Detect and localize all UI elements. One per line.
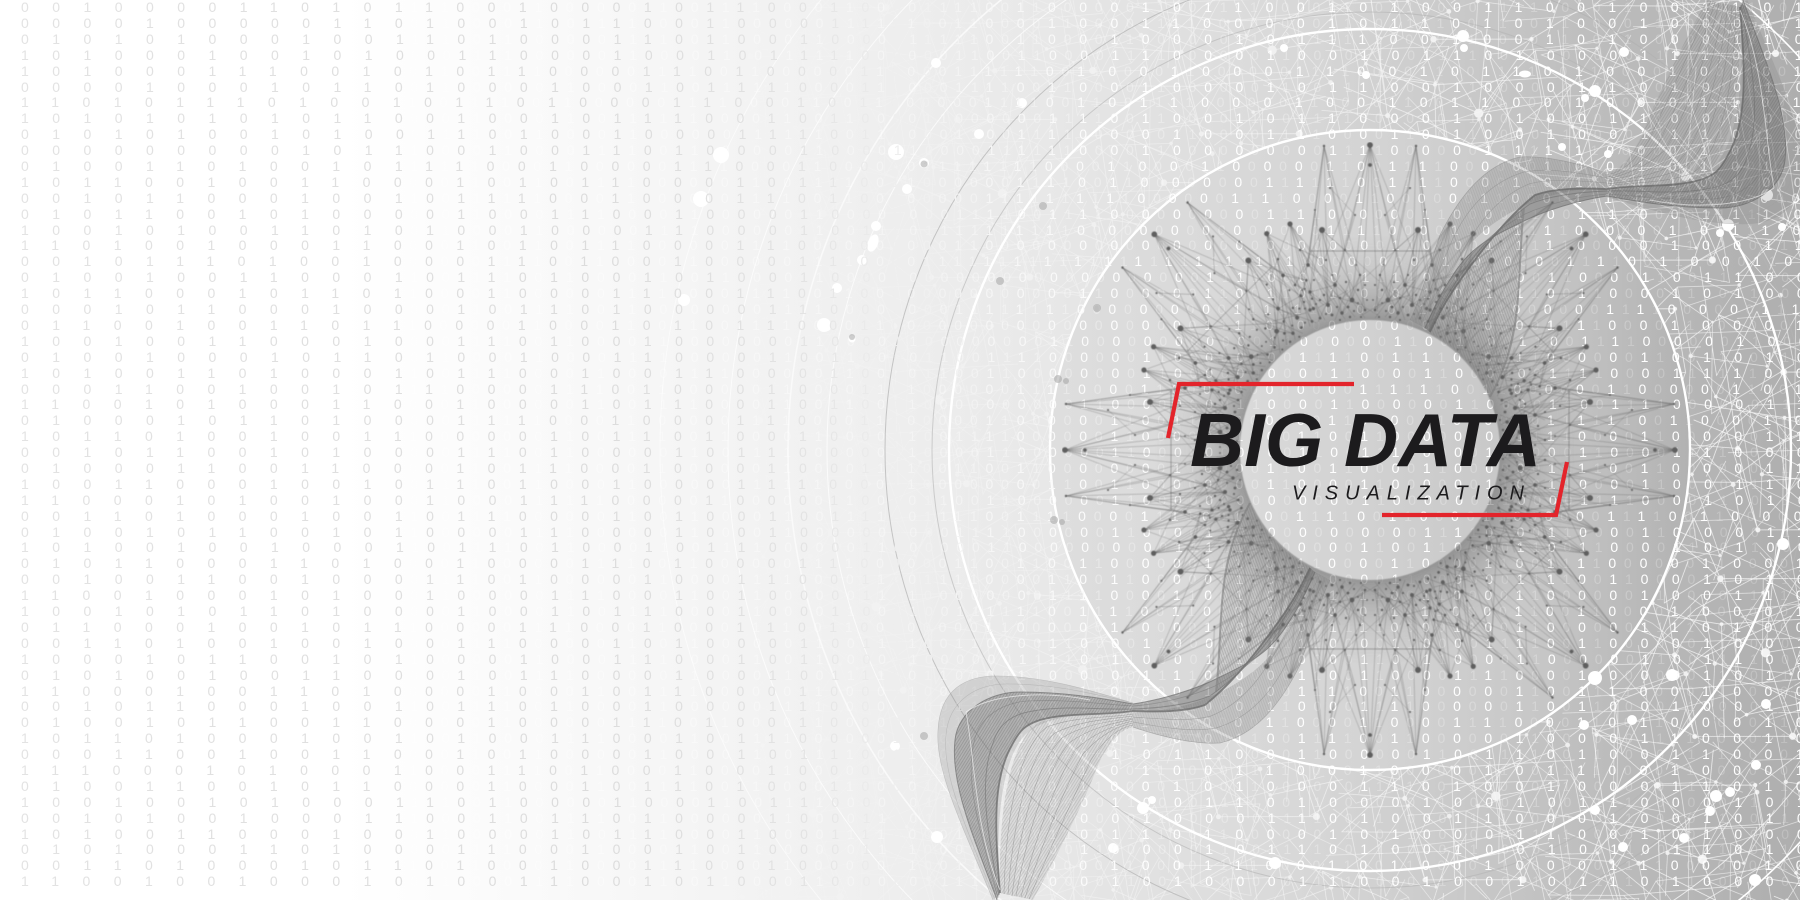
outer gray disk bbox=[1050, 130, 1690, 770]
red frame: top left bracket bbox=[1168, 384, 1354, 438]
network dots on rings bbox=[678, 30, 1789, 886]
wave ribbon: upper right bbox=[1410, 0, 1800, 397]
faint gray dots bbox=[849, 160, 1101, 740]
wave ribbon: lower left bbox=[938, 503, 1330, 900]
white network mesh bbox=[1006, 0, 1800, 900]
red frame: bottom right bracket bbox=[1382, 462, 1567, 515]
concentric rings bbox=[660, 0, 1800, 900]
inner hub disk bbox=[1240, 320, 1500, 580]
dense halo around hub bbox=[1155, 235, 1585, 665]
network star graph bbox=[1062, 142, 1678, 758]
subtitle: VISUALIZATION bbox=[1292, 482, 1525, 504]
title: BIG DATA bbox=[1190, 398, 1541, 482]
